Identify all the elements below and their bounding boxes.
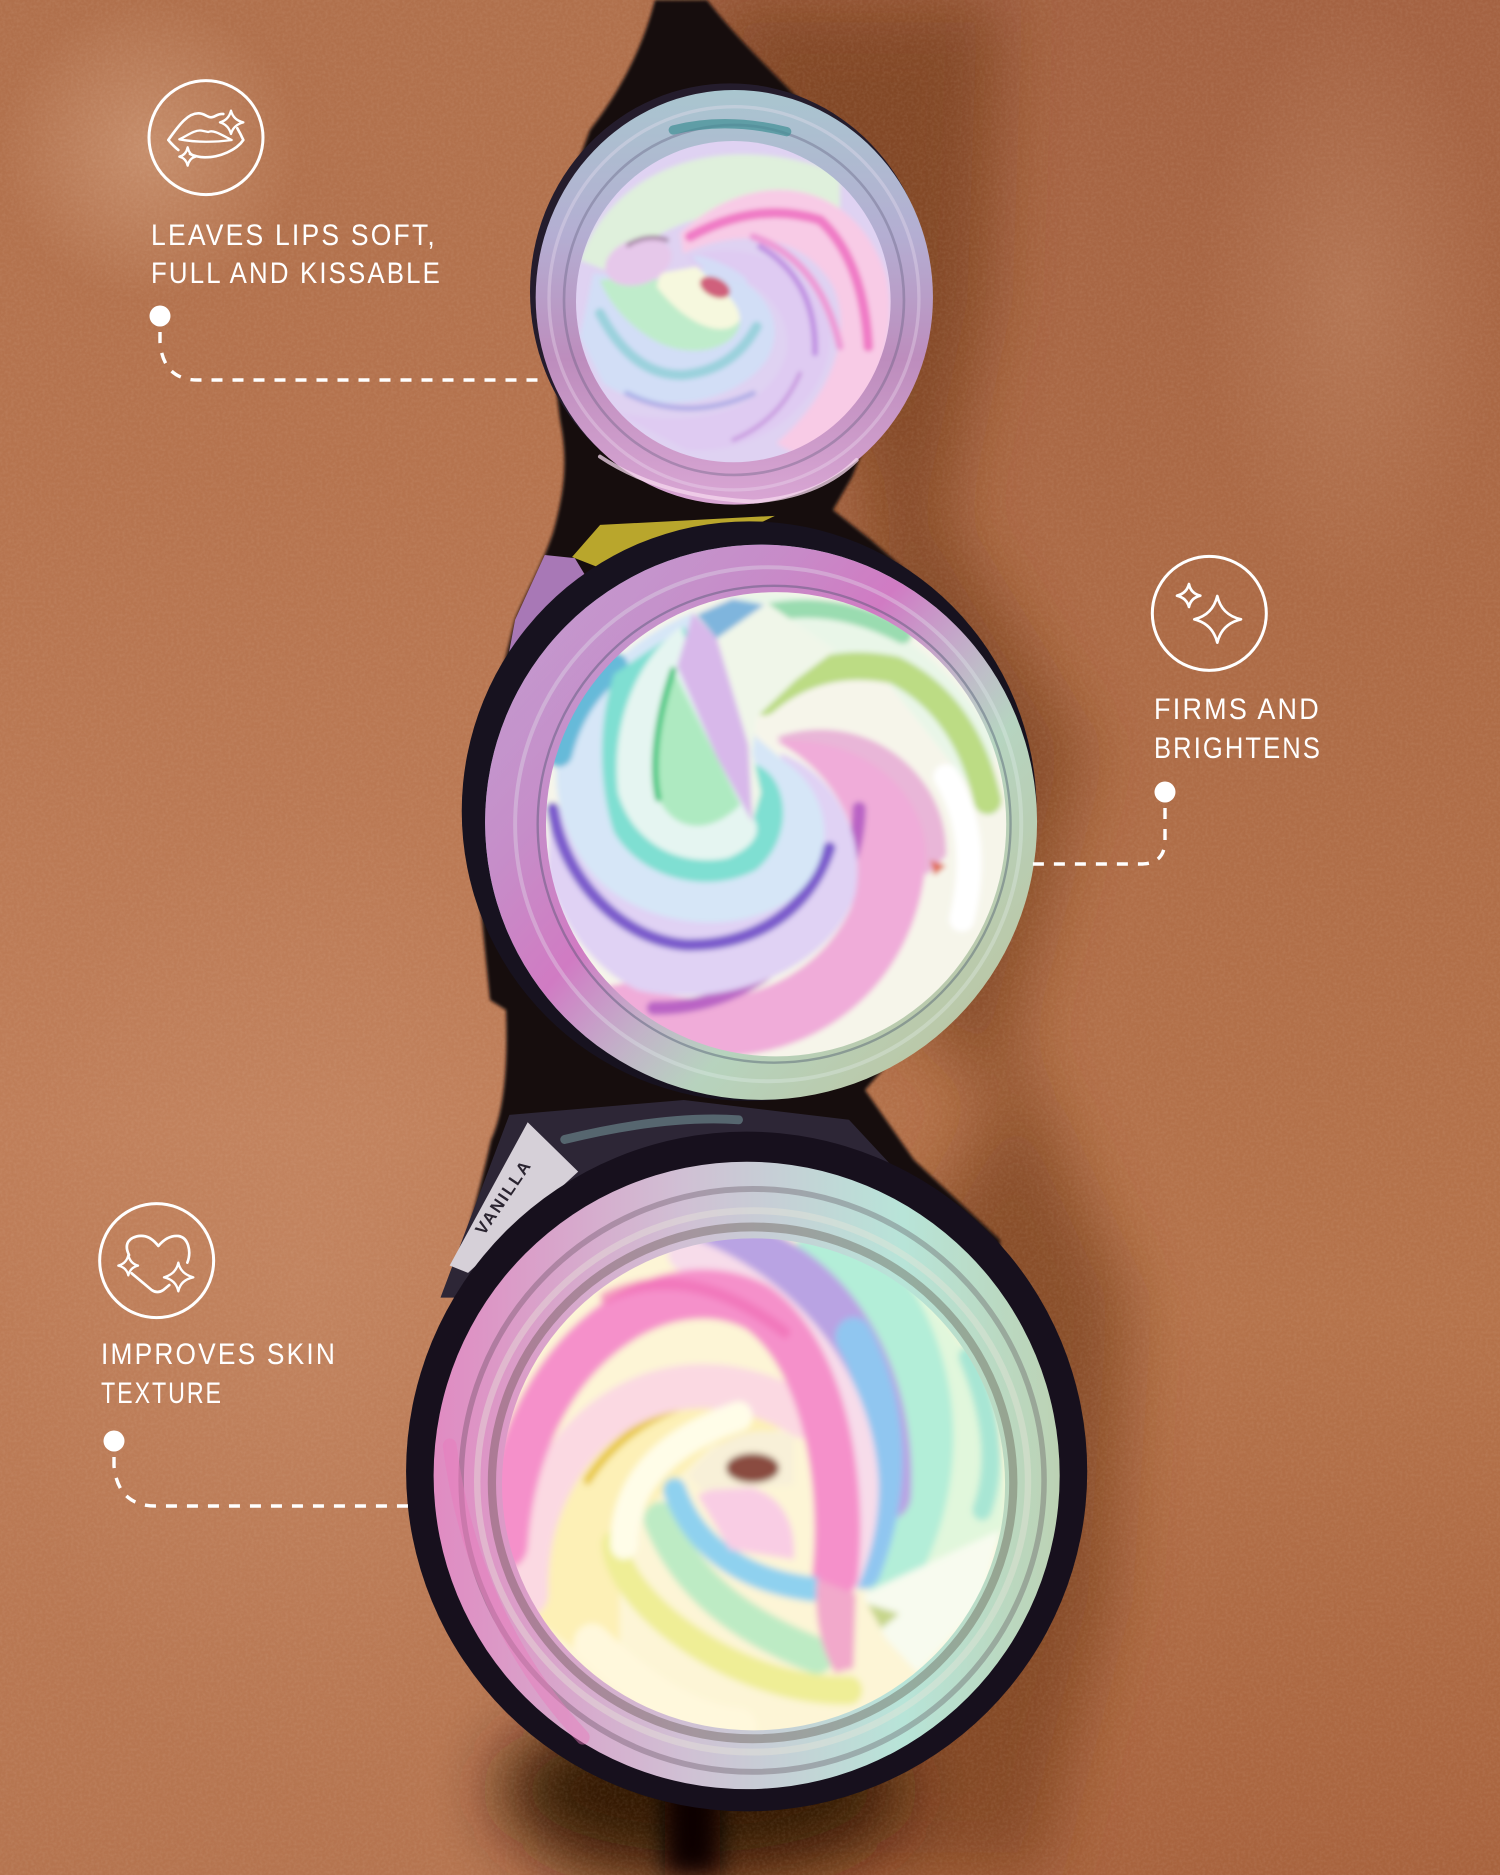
jar 3 cream swirl: [491, 1228, 1014, 1742]
jar 1: small lilac swirl: [530, 83, 933, 505]
jar 1 cream swirl: [576, 141, 891, 462]
text: leaves lips soft, full and kissable: LEAVES LIPS SOFT,: [151, 219, 437, 252]
callout: leaves lips soft: [149, 81, 542, 380]
callout: firms and brightens: [1030, 556, 1322, 864]
text: improves skin texture: IMPROVES SKIN: [101, 1338, 337, 1371]
icon: lips with sparkles: [149, 81, 263, 195]
dark strip below jar 3: [665, 1780, 720, 1875]
dashed leader line: [160, 332, 542, 380]
marker dot: [104, 1430, 124, 1452]
jar 2: mid jar with label edge: [462, 516, 1037, 1101]
marker dot: [1154, 782, 1176, 802]
dark gap between bodies: [430, 0, 1000, 1700]
callout: improves skin texture: [100, 1204, 408, 1506]
jar 2 glass rim: [485, 545, 1037, 1100]
icon: heart with sparkles: [100, 1204, 214, 1318]
jar 2 dark ring: [462, 521, 1037, 1101]
text: improves skin texture: TEXTURE: [101, 1377, 223, 1410]
jar 3 label text: VANILLA: [472, 1156, 536, 1238]
marker dot: [150, 306, 170, 326]
dashed leader line: [114, 1457, 408, 1506]
text: firms and brightens: FIRMS AND: [1154, 693, 1321, 726]
jar 3: large rainbow jar: [406, 1100, 1087, 1811]
text: firms and brightens: BRIGHTENS: [1154, 732, 1322, 765]
jar 1 glass rim: [530, 83, 933, 505]
jar 3 glass rim: [434, 1162, 1060, 1789]
jar 3 dark body and label: [406, 1100, 1087, 1811]
jar 2 cream swirl: [539, 587, 1013, 1065]
text: leaves lips soft, full and kissable: FULL AND KISSABLE: [151, 257, 442, 290]
icon: sparkles: [1152, 556, 1266, 670]
dashed leader line: [1030, 808, 1165, 864]
jar 2 yellow label: [572, 516, 775, 567]
